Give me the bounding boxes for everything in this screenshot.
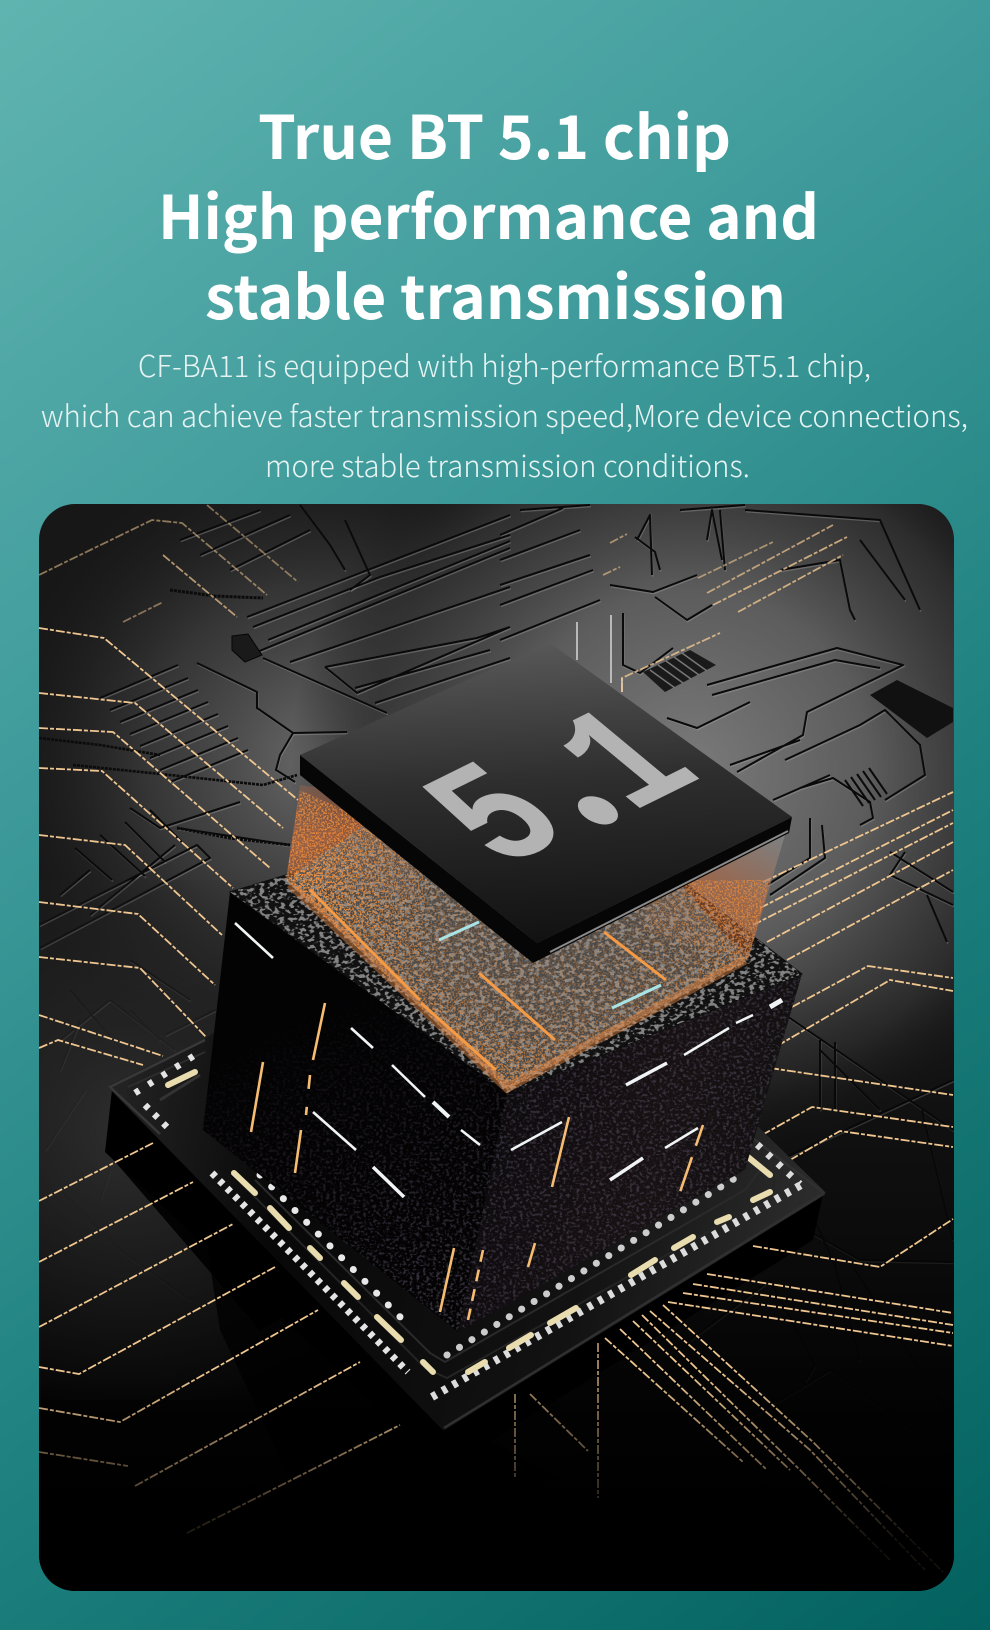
- base plate: [109, 1032, 826, 1430]
- gold traces: upper right: [603, 525, 953, 1046]
- chip label 5.1: 1: [517, 681, 747, 848]
- floating chip: [300, 639, 792, 963]
- description text: which can achieve faster transmission speed,More device connections,: [41, 392, 968, 436]
- chip label 5.1: 5: [388, 737, 618, 903]
- dark embossed circuit traces: [39, 504, 954, 1342]
- shadow under plate: [105, 1091, 822, 1362]
- white pins, lower left inner row: [260, 1175, 411, 1328]
- title: High performance and: [158, 170, 819, 257]
- chip label 5.1: .: [426, 675, 671, 864]
- white pins, lower left outer row: [212, 1173, 408, 1372]
- pale vertical traces: [577, 615, 622, 692]
- description text: [41, 342, 968, 486]
- chip top face: [300, 643, 792, 943]
- white pins, lower right outer row: [432, 1185, 801, 1397]
- white light bars on cube: [235, 923, 782, 1197]
- title: stable transmission: [205, 250, 786, 337]
- glowing edge of beam footprint: [290, 884, 745, 1088]
- gold traces: lower left: [39, 1143, 400, 1533]
- description text: more stable transmission conditions.: [265, 442, 750, 486]
- gold contacts: [168, 1072, 770, 1372]
- orange light bars on cube: [251, 1003, 703, 1320]
- gold traces: upper left: [39, 505, 298, 1065]
- white pins, lower right inner row: [447, 1172, 745, 1355]
- chip underside: [300, 755, 792, 963]
- panel: chip illustration: [39, 504, 961, 1591]
- circuit board surface: [39, 504, 954, 1591]
- cube: [203, 867, 803, 1332]
- description text: CF-BA11 is equipped with high-performance BT5.1 chip,: [138, 342, 871, 386]
- trace fade at panel bottom: [39, 1370, 954, 1591]
- gold traces: lower right: [515, 1068, 953, 1572]
- white pins, right corner: [755, 1142, 802, 1184]
- shading toward bottom of panel: [39, 880, 954, 1591]
- title: True BT 5.1 chip: [258, 90, 731, 177]
- title: [158, 90, 819, 337]
- white pins, left corner: [135, 1052, 200, 1127]
- cube left face: [200, 890, 510, 1340]
- hologram beams between chip and cube: [280, 785, 785, 1095]
- cube top face: [229, 867, 803, 1094]
- cube right face: [458, 974, 803, 1334]
